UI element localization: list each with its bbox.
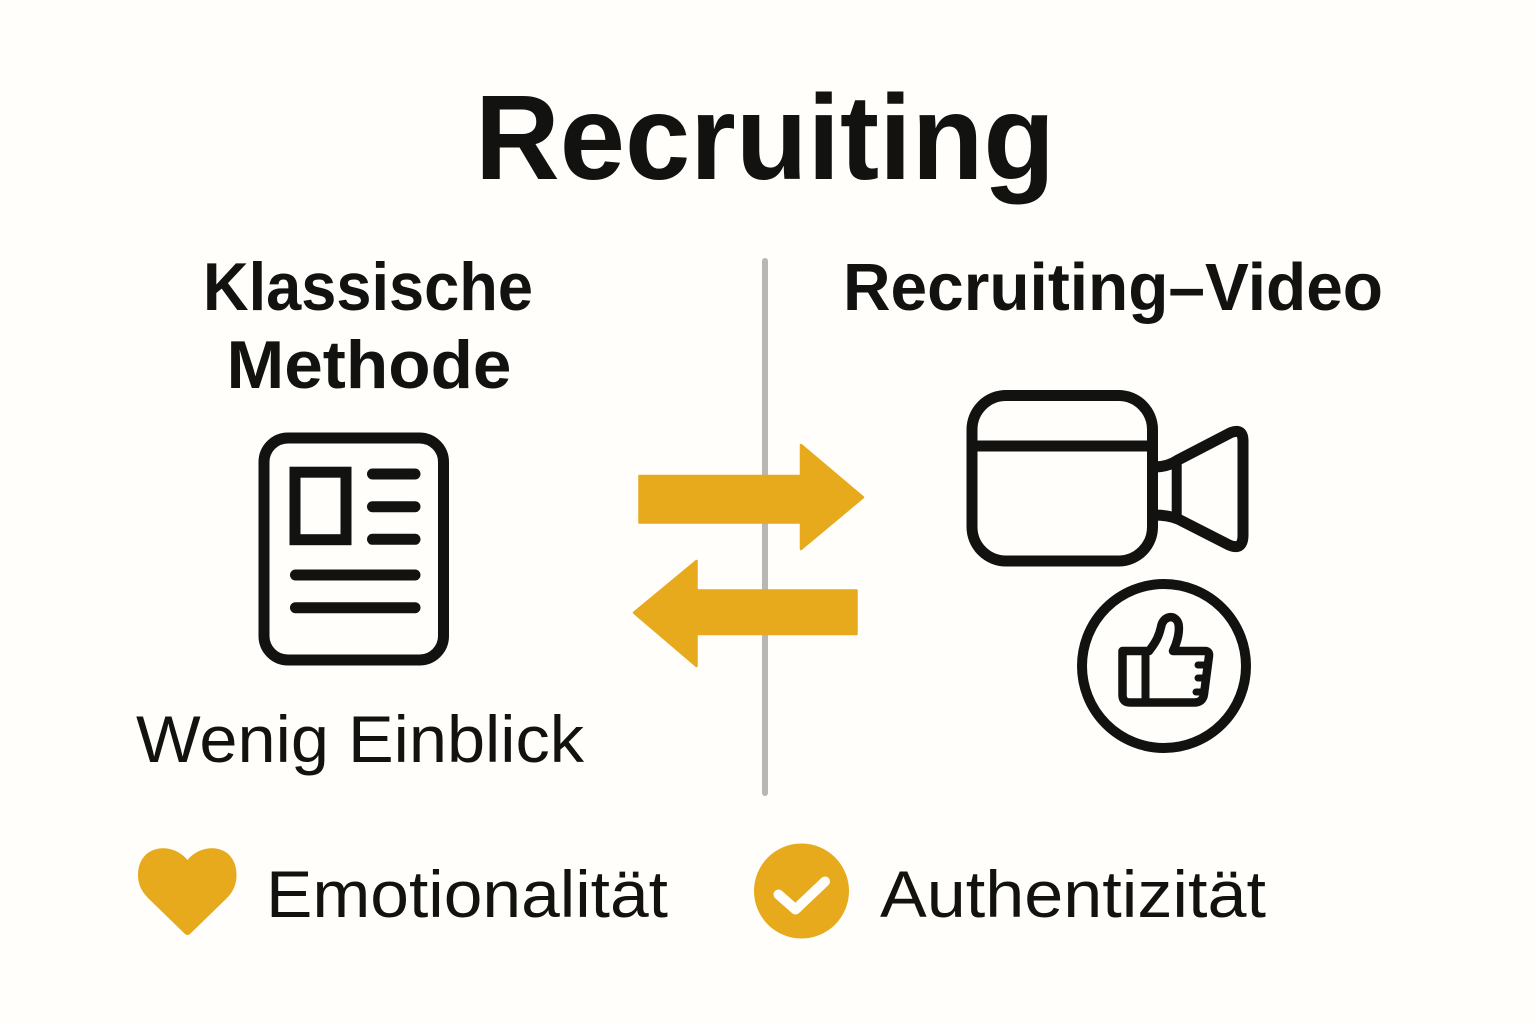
title: Recruiting xyxy=(475,69,1055,205)
heading: Klassische Methode xyxy=(203,249,533,403)
icon: heart xyxy=(138,848,236,935)
arrow: right xyxy=(640,445,863,549)
icon: thumbs up badge xyxy=(1082,584,1246,748)
label: Emotionalität: Emotionalität xyxy=(266,857,668,931)
heading: Klassische Methode: Methode xyxy=(226,327,512,403)
arrow: left xyxy=(634,561,856,666)
label: Authentizität: Authentizität xyxy=(880,857,1266,931)
icon: check badge xyxy=(754,844,849,938)
center divider xyxy=(762,258,768,796)
heading: Recruiting-Video: Recruiting–Video xyxy=(843,250,1383,325)
text: Wenig Einblick: Wenig Einblick xyxy=(136,702,585,776)
icon: document xyxy=(264,438,444,660)
heading: Klassische Methode: Klassische xyxy=(203,249,533,325)
icon: video camera xyxy=(972,396,1243,561)
